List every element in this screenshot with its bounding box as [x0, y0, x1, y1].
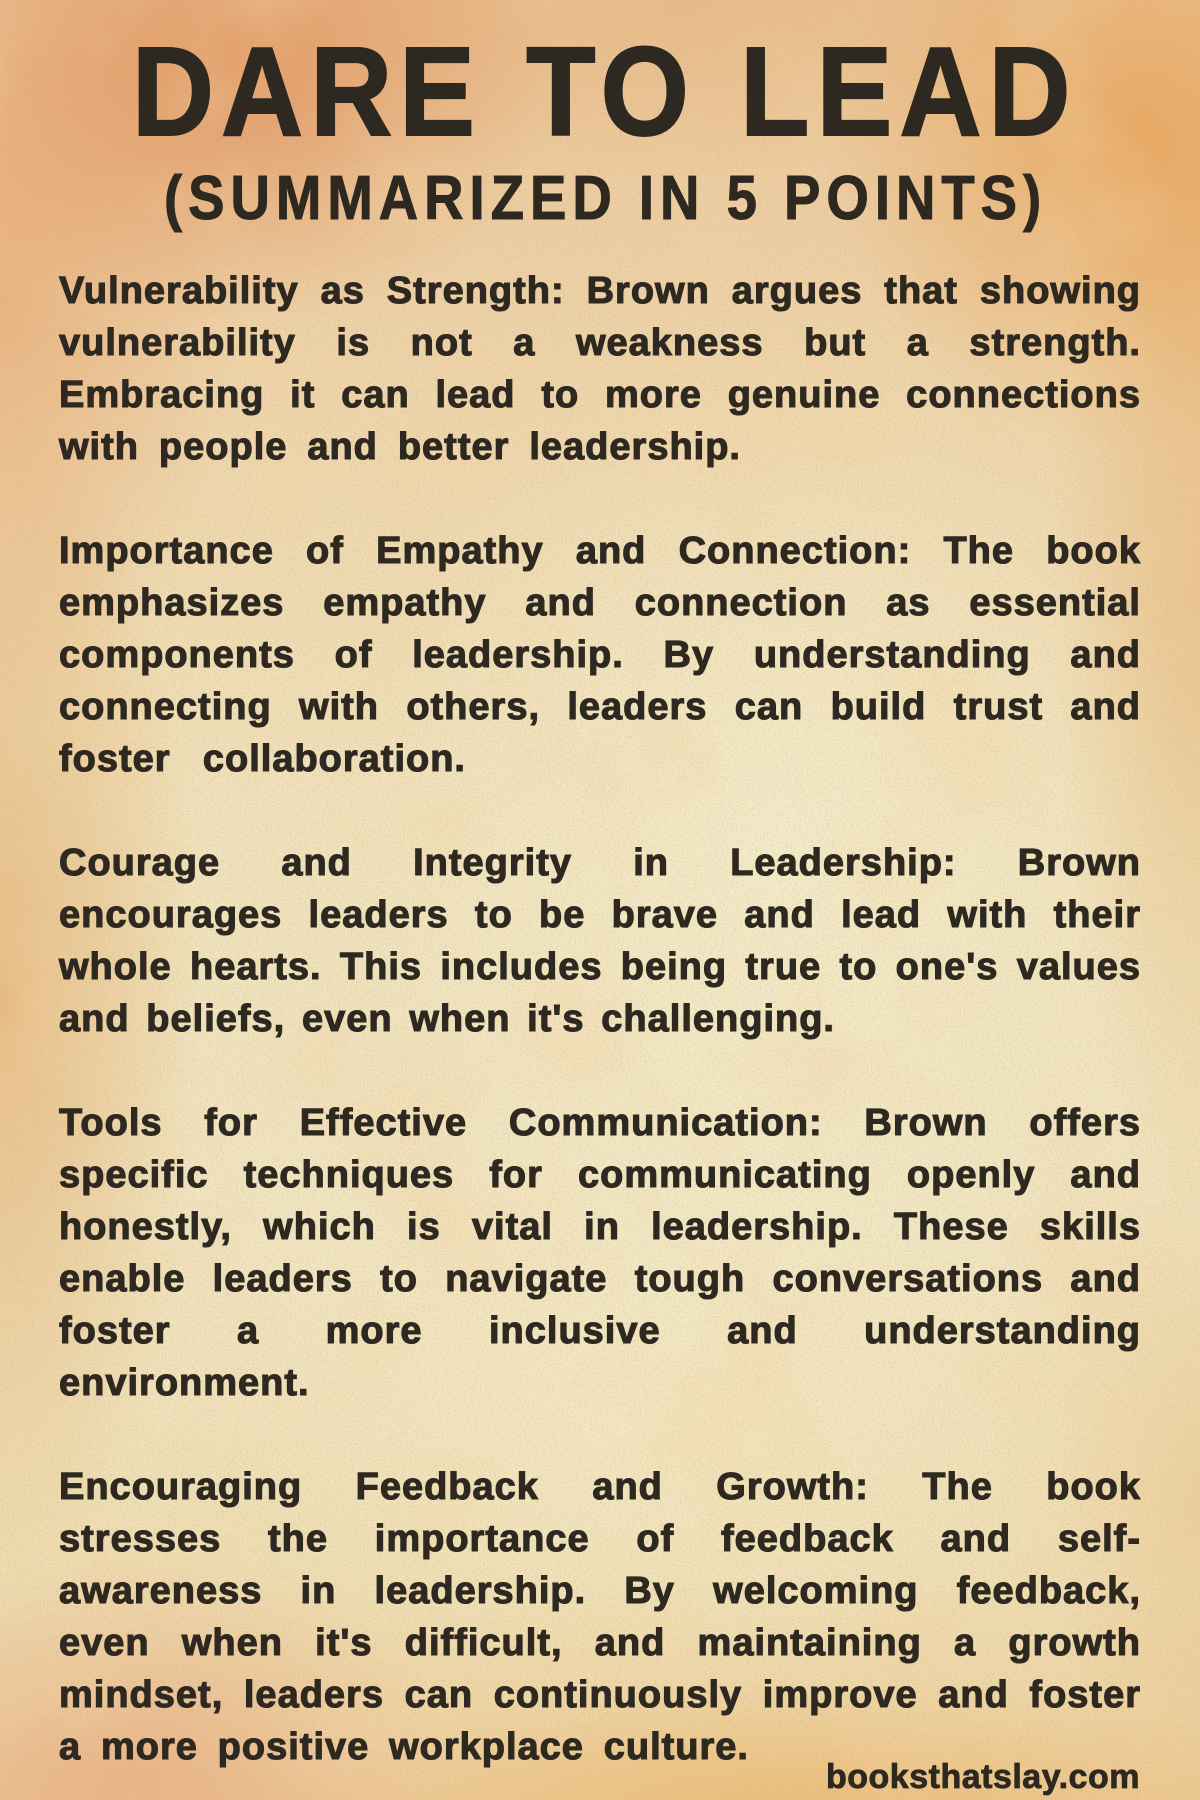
text block: point 4 effective communication: honestly, which is vital in leadership. These skills: [59, 1206, 1141, 1248]
text block: point 2 empathy and connection: connecting with others, leaders can build trust and: [59, 686, 1141, 728]
text block: point 3 courage and integrity: Courage and Integrity in Leadership: Brown: [59, 842, 1141, 884]
text block: point 4 effective communication: [58, 1102, 1141, 1404]
text block: point 4 effective communication: enable leaders to navigate tough conversations and: [59, 1258, 1141, 1300]
text block: point 5 feedback and growth: a more positive workplace culture.: [59, 1726, 749, 1768]
text block: point 1 vulnerability as strength: Vulnerability as Strength: Brown argues that showing: [59, 270, 1141, 312]
text block: point 1 vulnerability as strength: with people and better leadership.: [59, 426, 741, 468]
text block: point 3 courage and integrity: [58, 842, 1141, 1040]
text block: point 4 effective communication: Tools for Effective Communication: Brown offers: [59, 1102, 1141, 1144]
text block: point 1 vulnerability as strength: vulnerability is not a weakness but a strength.: [59, 322, 1141, 364]
text block: point 5 feedback and growth: awareness in leadership. By welcoming feedback,: [59, 1570, 1141, 1612]
text block: point 5 feedback and growth: stresses the importance of feedback and self-: [59, 1518, 1141, 1560]
subtitle: (SUMMARIZED IN 5 POINTS): [164, 164, 1047, 233]
text block: point 4 effective communication: environment.: [59, 1362, 310, 1404]
text block: point 3 courage and integrity: and beliefs, even when it's challenging.: [59, 998, 835, 1040]
title: DARE TO LEAD: [132, 21, 1078, 162]
text block: point 2 empathy and connection: components of leadership. By understanding and: [59, 634, 1141, 676]
text block: point 2 empathy and connection: Importance of Empathy and Connection: The book: [59, 530, 1141, 572]
text block: point 5 feedback and growth: Encouraging Feedback and Growth: The book: [59, 1466, 1141, 1508]
text block: point 4 effective communication: specific techniques for communicating openly and: [59, 1154, 1141, 1196]
source url: booksthatslay.com: [826, 1758, 1140, 1796]
text block: point 5 feedback and growth: mindset, leaders can continuously improve and foster: [59, 1674, 1141, 1716]
text block: point 5 feedback and growth: even when it's difficult, and maintaining a growth: [59, 1622, 1141, 1664]
text block: point 4 effective communication: foster a more inclusive and understanding: [59, 1310, 1141, 1352]
text block: point 3 courage and integrity: whole hearts. This includes being true to one's values: [59, 946, 1141, 988]
text block: point 2 empathy and connection: emphasizes empathy and connection as essential: [59, 582, 1141, 624]
text block: point 3 courage and integrity: encourages leaders to be brave and lead with their: [59, 894, 1141, 936]
text block: point 2 empathy and connection: foster collaboration.: [59, 738, 466, 780]
text block: point 5 feedback and growth: [59, 1466, 1141, 1768]
text block: point 2 empathy and connection: [59, 530, 1141, 780]
text block: point 1 vulnerability as strength: Embracing it can lead to more genuine connections: [59, 374, 1141, 416]
text block: point 1 vulnerability as strength: [58, 270, 1141, 468]
